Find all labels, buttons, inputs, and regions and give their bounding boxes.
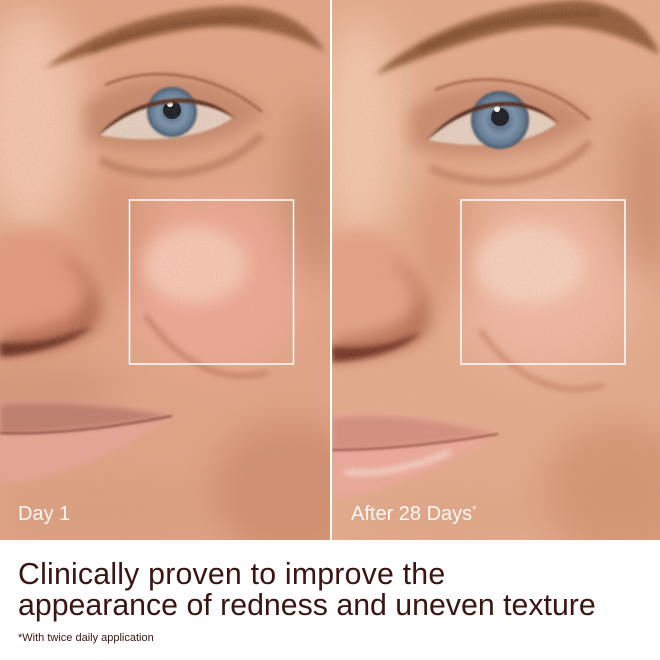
label: After 28 Days: * [472, 504, 477, 516]
label: Day 1: Day 1 [18, 503, 70, 525]
eye [410, 80, 592, 182]
selection square: Day 1 [130, 200, 294, 364]
footnote: *With twice daily application [18, 632, 154, 644]
photo: Day 1 [0, 0, 330, 540]
photo: After 28 Days [332, 0, 660, 540]
eyebrow [45, 6, 325, 68]
lips [0, 420, 162, 482]
skin texture [3, 9, 312, 356]
heading: appearance of redness and uneven texture [18, 589, 596, 622]
label: After 28 Days: After 28 Days [351, 503, 472, 525]
skin texture [334, 8, 644, 360]
selection square: After 28 Days [461, 200, 625, 364]
heading [18, 558, 596, 622]
eye [85, 74, 265, 174]
heading: Clinically proven to improve the [18, 558, 445, 591]
lips [333, 438, 486, 496]
eyebrow [375, 0, 660, 75]
